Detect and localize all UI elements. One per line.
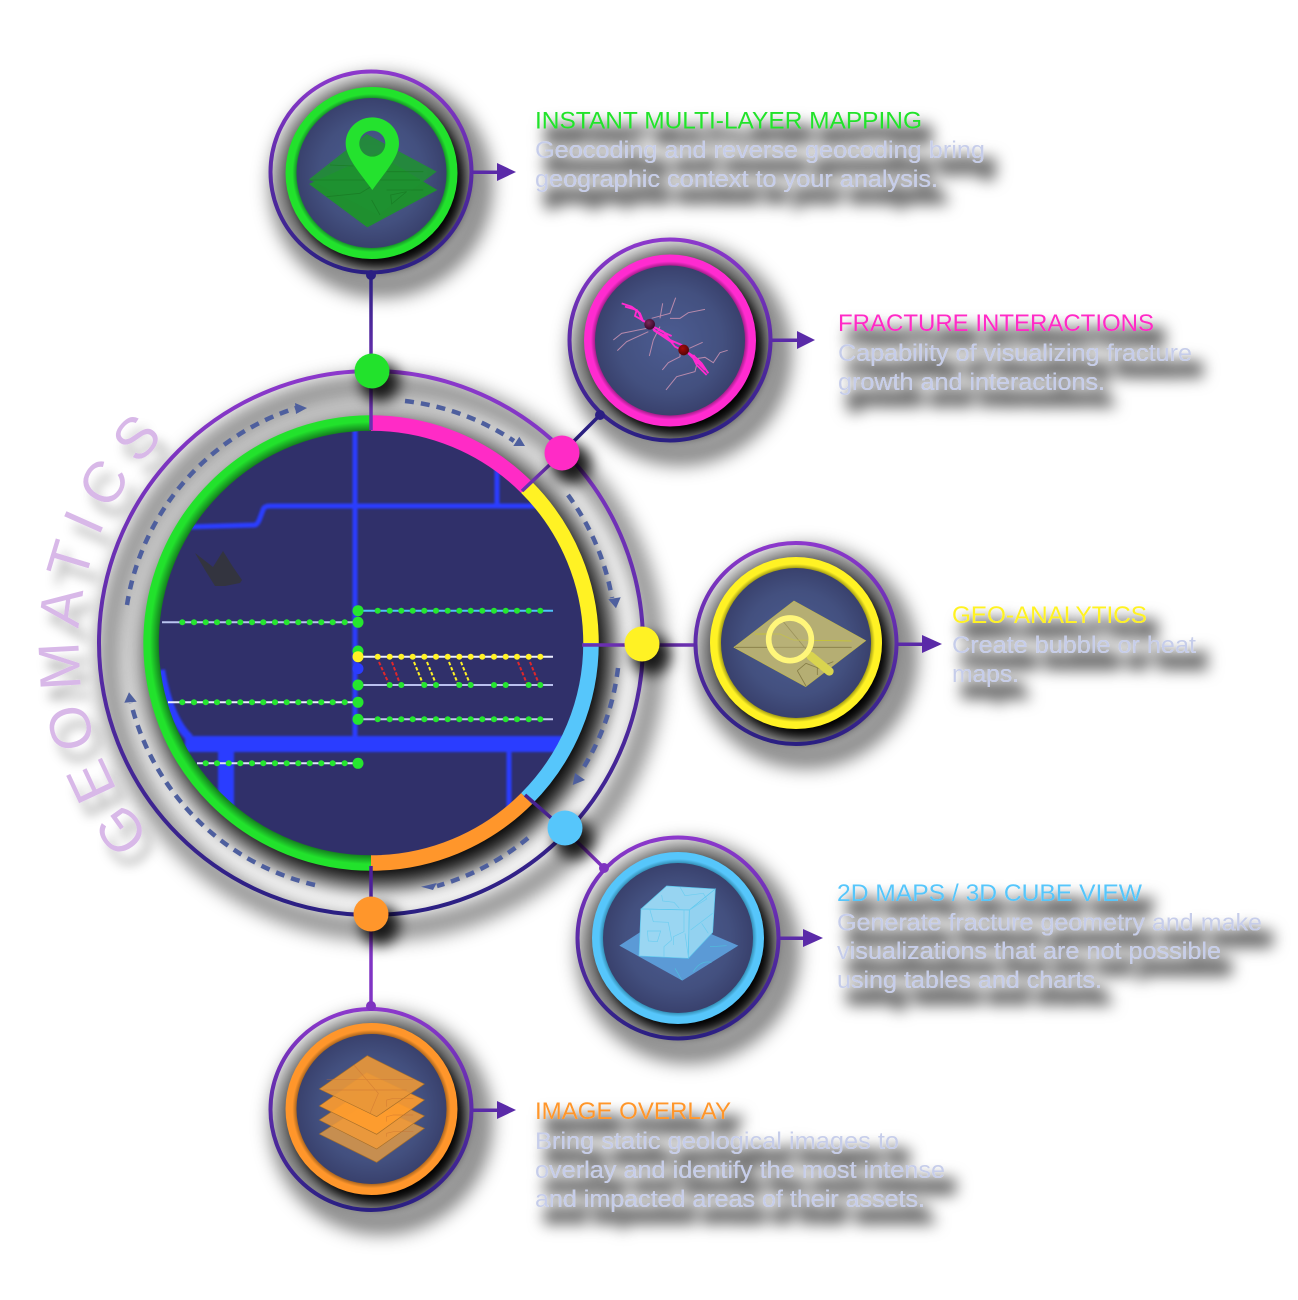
dashed links bbox=[379, 662, 539, 684]
text: 2D maps / 3D cube view bbox=[837, 880, 1262, 994]
node: pink bbox=[544, 436, 580, 470]
ring shadows: small circles bbox=[281, 86, 906, 1223]
panel: image overlay circle bbox=[270, 1001, 472, 1210]
text: instant multi-layer mapping: INSTANT MULTI-LAYER MAPPING bbox=[535, 108, 922, 134]
text: geo-analytics: GEO-ANALYTICS bbox=[952, 602, 1147, 629]
text: image overlay: and impacted areas of their assets. bbox=[535, 1186, 925, 1213]
icon: map with magnifier bbox=[734, 601, 866, 687]
map dark blob bbox=[195, 551, 242, 586]
curved title: GEOMATICS: GEOMATICS bbox=[38, 417, 172, 870]
text: fracture interactions: Capability of visualizing fracture bbox=[838, 340, 1192, 367]
outer dial ring bbox=[99, 371, 643, 915]
arrow: cube bbox=[779, 929, 823, 947]
text: image overlay: Bring static geological images to bbox=[535, 1128, 899, 1155]
arrow: mapping bbox=[472, 163, 516, 181]
icon: stacked layers bbox=[319, 1056, 424, 1162]
connectors bbox=[371, 275, 695, 1006]
text: instant multi-layer mapping bbox=[535, 108, 985, 193]
text: image overlay: overlay and identify the most intense bbox=[535, 1157, 945, 1184]
arrow: analytics bbox=[897, 635, 942, 653]
data lines bbox=[162, 611, 553, 763]
text: instant multi-layer mapping: geographic context to your analysis. bbox=[535, 166, 938, 193]
panel: instant multi-layer mapping circle bbox=[270, 72, 472, 280]
text: 2D maps / 3D cube view: visualizations that are not possible bbox=[837, 938, 1221, 965]
central map bbox=[150, 425, 586, 858]
icon: map with pin bbox=[309, 117, 437, 227]
node: green bbox=[354, 354, 390, 388]
arrow: overlay bbox=[472, 1101, 516, 1119]
text: fracture interactions bbox=[838, 310, 1192, 396]
large nodes bbox=[352, 605, 364, 769]
text: fracture interactions: FRACTURE INTERACTIONS bbox=[838, 310, 1154, 337]
map roads bbox=[150, 425, 570, 820]
node shadows bbox=[360, 362, 671, 945]
icon: fractures bbox=[613, 298, 728, 390]
panel: fracture interactions circle bbox=[570, 240, 770, 440]
text: geo-analytics bbox=[952, 602, 1196, 688]
coloured ring segments bbox=[151, 423, 591, 863]
text: 2D maps / 3D cube view: 2D MAPS / 3D CUBE VIEW bbox=[837, 880, 1142, 907]
left green dots bbox=[179, 619, 348, 766]
node: yellow bbox=[624, 626, 660, 662]
text: fracture interactions: growth and interactions. bbox=[838, 369, 1105, 396]
shadows behind main dial bbox=[109, 385, 653, 929]
text: 2D maps / 3D cube view: Generate fracture geometry and make bbox=[837, 910, 1262, 936]
node: orange bbox=[354, 896, 388, 932]
text: image overlay bbox=[535, 1098, 945, 1213]
panel: geo-analytics circle bbox=[696, 543, 896, 744]
panel: 2D maps / 3D cube circle bbox=[578, 838, 778, 1038]
text: 2D maps / 3D cube view: using tables and charts. bbox=[837, 967, 1102, 994]
node: blue bbox=[548, 810, 582, 846]
dashed rotation arrows bbox=[124, 401, 621, 890]
icon: cube on map bbox=[619, 886, 738, 981]
right dots bbox=[375, 608, 543, 722]
arrow: fracture bbox=[772, 331, 815, 349]
text: image overlay: IMAGE OVERLAY bbox=[535, 1098, 731, 1125]
text: instant multi-layer mapping: Geocoding and reverse geocoding bring bbox=[535, 137, 985, 164]
text: geo-analytics: Create bubble or heat bbox=[952, 632, 1196, 659]
text: geo-analytics: maps. bbox=[952, 661, 1019, 688]
